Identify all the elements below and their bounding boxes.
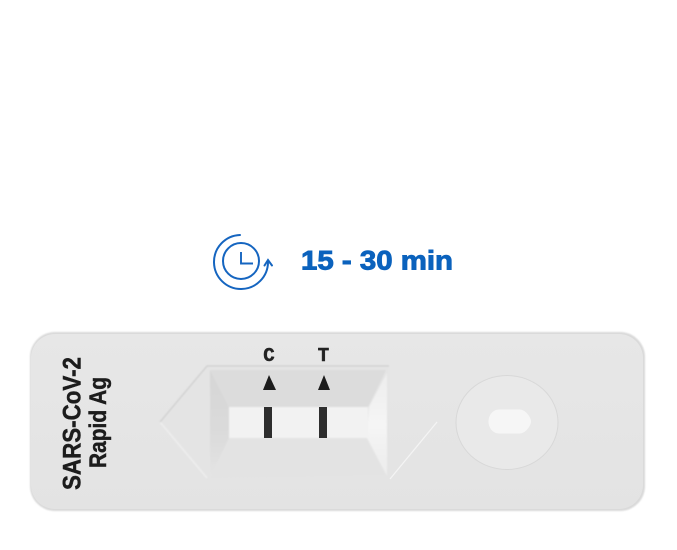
printed label: SARS-CoV-2 Rapid Ag: Rapid Ag	[85, 377, 111, 468]
marker T	[318, 345, 330, 390]
printed label: SARS-CoV-2 Rapid Ag	[59, 357, 111, 490]
printed label: SARS-CoV-2 Rapid Ag: SARS-CoV-2	[59, 357, 87, 490]
marker C	[263, 345, 276, 390]
embossed diagonal line	[390, 422, 437, 479]
inner window walls	[210, 370, 386, 407]
marker T: T	[318, 345, 329, 367]
sample hole	[488, 410, 531, 434]
duration text: 15 - 30 min	[301, 246, 453, 276]
sample well	[456, 376, 558, 470]
time indicator	[214, 235, 453, 289]
test window housing	[160, 366, 389, 478]
result strip	[229, 407, 368, 438]
icon: clock with circular arrow	[214, 235, 272, 289]
arrow-shaped recess	[160, 366, 389, 478]
test line	[319, 407, 327, 438]
marker C: C	[263, 345, 275, 367]
cassette body	[30, 332, 645, 511]
test cassette	[30, 332, 645, 511]
control line	[264, 407, 272, 438]
